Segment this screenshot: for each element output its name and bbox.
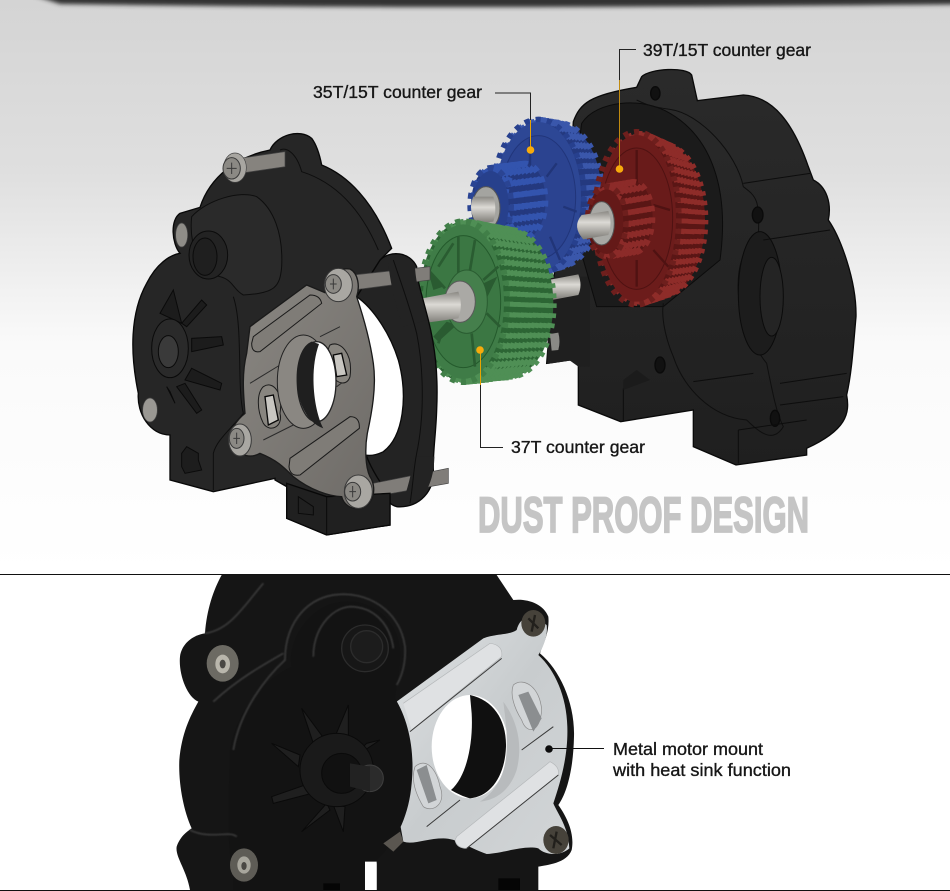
plate screw heads: [223, 158, 372, 508]
blue gear bearing and shaft: [471, 187, 500, 230]
label: 35T/15T counter gear: 35T/15T counter gear: [313, 82, 482, 102]
callout: metal motor mount: [545, 739, 791, 780]
right gearbox housing: [547, 70, 856, 465]
flange ear overlays: [388, 257, 434, 505]
callout: metal motor mount: with heat sink function: [612, 760, 791, 780]
rear screws: [143, 152, 448, 497]
red gear bearing and shaft: [577, 202, 614, 245]
photo: boss: [342, 625, 388, 672]
photo: star hub and shaft: [272, 705, 383, 832]
flange opening: [357, 297, 403, 455]
blue pinion: [471, 163, 546, 242]
label: 37T counter gear: [476, 346, 645, 457]
photo: metal motor mount: [397, 618, 569, 854]
star hub: [152, 290, 223, 413]
connector blocks: [182, 447, 202, 473]
section divider lines: [0, 574, 950, 891]
top shadow band: [30, 0, 950, 7]
small screw tip: [550, 333, 559, 351]
left gearbox housing: [133, 134, 448, 535]
label: 39T/15T counter gear: 39T/15T counter gear: [643, 40, 811, 60]
photo: white gap below body: [365, 862, 377, 890]
flange inner edge detail: [393, 260, 422, 503]
photo panel: [0, 575, 950, 890]
label: 35T/15T counter gear: [313, 82, 534, 154]
photo: motor opening: [432, 695, 508, 798]
photo: screws: [207, 610, 569, 882]
green 37T counter gear: [419, 222, 553, 382]
upper cylinder boss: [191, 195, 282, 295]
housing body: [133, 134, 392, 535]
label: 39T/15T counter gear: [616, 40, 811, 173]
callout: metal motor mount: Metal motor mount: [613, 739, 763, 759]
background: [0, 0, 950, 574]
photo: gearbox body: [177, 575, 574, 890]
photo: body contour highlights: [190, 583, 405, 837]
connecting shaft: [548, 274, 580, 300]
red 39T/15T counter gear: [587, 132, 705, 304]
body edge lines: [213, 149, 378, 490]
red pinion: [587, 181, 653, 258]
green gear bearing and shaft: [417, 281, 475, 324]
label: 37T counter gear: 37T counter gear: [511, 437, 645, 457]
gear train: [417, 120, 705, 382]
blue 35T/15T counter gear: [471, 120, 602, 273]
housing flange ring: [357, 254, 437, 507]
photo: front cover: [229, 601, 413, 890]
metal motor plate: [229, 269, 374, 509]
